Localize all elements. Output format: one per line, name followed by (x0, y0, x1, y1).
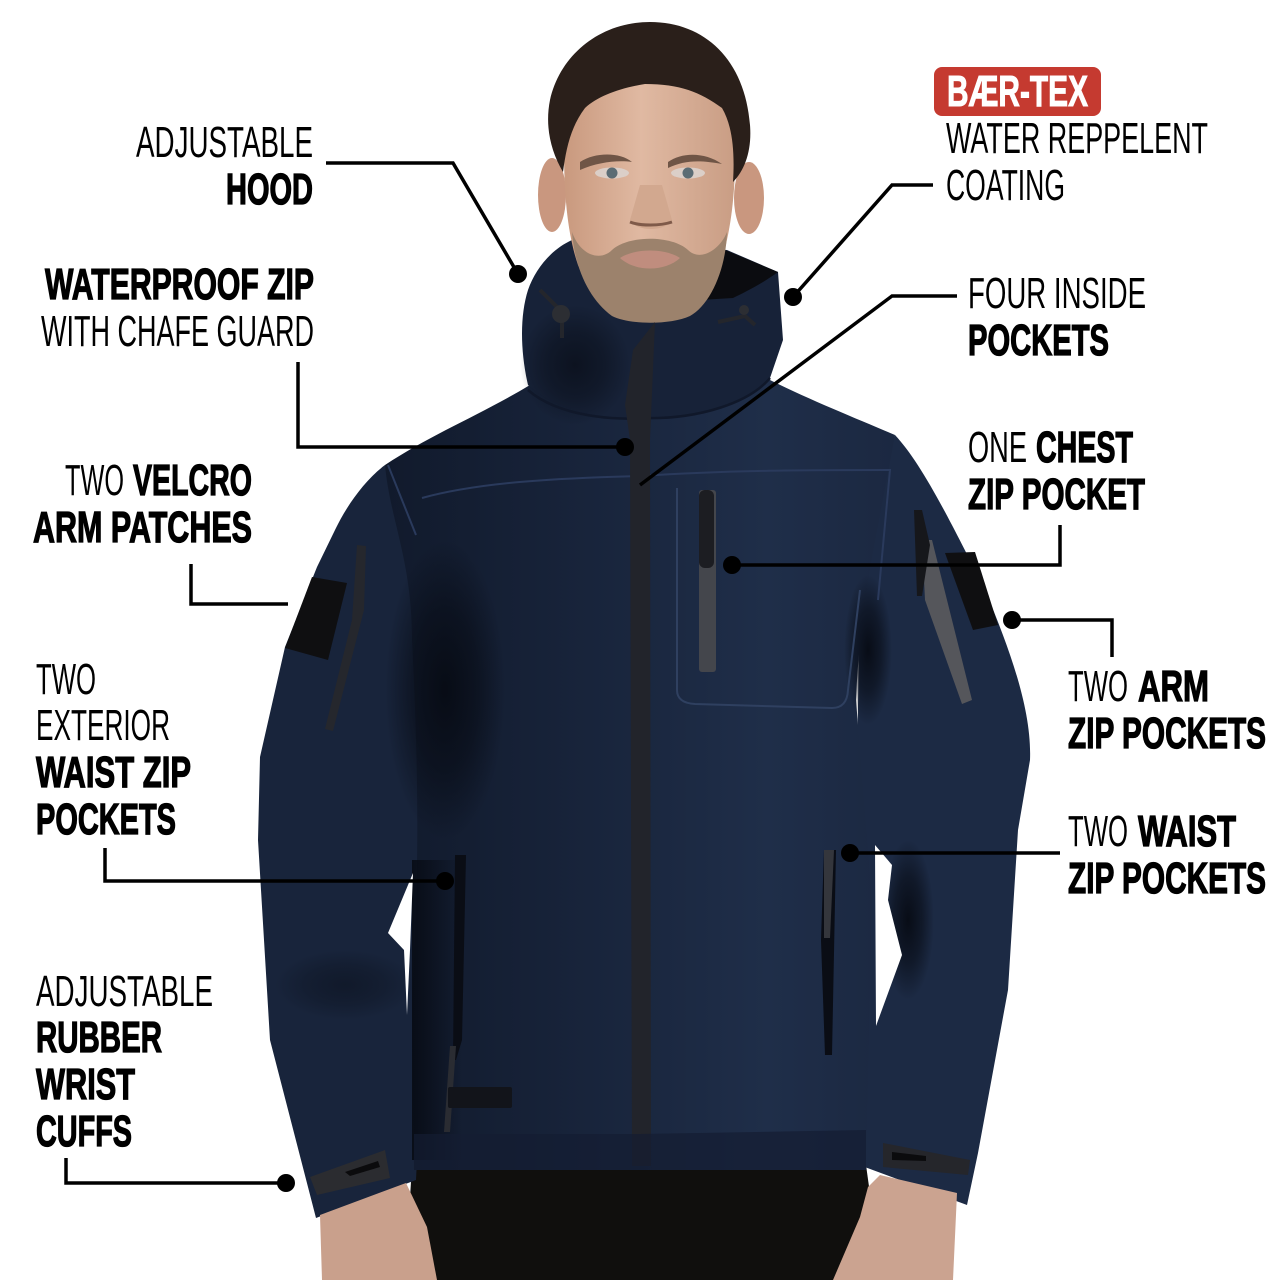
left drawcord (540, 290, 570, 338)
left waist zip (444, 855, 466, 1132)
hood interior (700, 250, 778, 300)
callout: velcro arm patches: ARM PATCHES (33, 503, 252, 552)
callout: water repellent coating: BÆR-TEX (947, 67, 1088, 116)
left arm patch (285, 577, 347, 660)
callout: one chest zip pocket (723, 423, 1145, 574)
callout: exterior waist zip pockets: EXTERIOR (36, 701, 170, 750)
callout: waist zip pockets (841, 807, 1266, 903)
left hand (320, 1183, 437, 1280)
chest pocket (677, 488, 860, 708)
callout: water repellent coating (784, 67, 1208, 306)
ears (538, 158, 764, 234)
illustration: man wearing jacket (258, 22, 1030, 1280)
callout: adjustable hood: ADJUSTABLE (136, 118, 313, 167)
center zip (625, 322, 655, 1166)
callout: rubber wrist cuffs: CUFFS (36, 1107, 132, 1156)
hair (548, 22, 750, 182)
callout: arm zip pockets: ARM (1138, 662, 1209, 711)
yoke seam (388, 465, 890, 600)
callout: exterior waist zip pockets: WAIST ZIP (36, 748, 191, 797)
right drawcord (718, 305, 755, 325)
callout: adjustable hood: HOOD (226, 165, 313, 214)
callout: exterior waist zip pockets: POCKETS (36, 795, 176, 844)
lips (620, 250, 680, 268)
callout: adjustable hood (136, 118, 527, 283)
right cuff strap (883, 1143, 970, 1175)
callout: waterproof zip (41, 260, 634, 456)
callout: exterior waist zip pockets (36, 655, 454, 890)
gap between right arm and torso (875, 845, 902, 1026)
brows and eyes (580, 154, 722, 178)
callout: waist zip pockets: TWO (1068, 807, 1128, 856)
callout: velcro arm patches: TWO (65, 456, 124, 505)
right sleeve (856, 435, 1030, 1205)
callout: arm zip pockets: TWO (1068, 662, 1128, 711)
left sleeve (258, 465, 440, 1218)
hem band (414, 1130, 866, 1170)
callout: exterior waist zip pockets: TWO (36, 655, 96, 704)
right waist zip (821, 850, 836, 1055)
callout: waterproof zip: WATERPROOF ZIP (45, 260, 314, 309)
callout: one chest zip pocket: ZIP POCKET (968, 470, 1145, 519)
hood and collar (522, 240, 783, 418)
callout: waist zip pockets: WAIST (1138, 807, 1236, 856)
hood shadow (520, 305, 630, 425)
right hand (833, 1175, 957, 1280)
callout: four inside pockets (640, 269, 1146, 485)
jacket body (385, 380, 895, 1170)
beard (572, 232, 727, 323)
callout: velcro arm patches (33, 456, 288, 604)
nose (630, 185, 672, 229)
callout: water repellent coating: COATING (946, 161, 1065, 210)
gap between left arm and torso (388, 873, 413, 1015)
jacket shadows (275, 540, 934, 1160)
callout: velcro arm patches: VELCRO (133, 456, 252, 505)
callout: rubber wrist cuffs: WRIST (36, 1060, 135, 1109)
collar fold (528, 378, 770, 419)
callout: one chest zip pocket: CHEST (1036, 423, 1133, 472)
head (564, 80, 735, 322)
callout: one chest zip pocket: ONE (968, 423, 1027, 472)
callout: arm zip pockets (1003, 611, 1266, 758)
callout: rubber wrist cuffs (36, 967, 295, 1192)
brand patch (448, 1087, 512, 1108)
callout: rubber wrist cuffs: ADJUSTABLE (36, 967, 213, 1016)
callout: four inside pockets: POCKETS (968, 316, 1109, 365)
right arm patch (945, 552, 998, 630)
callout: waterproof zip: WITH CHAFE GUARD (41, 307, 314, 356)
right arm zip (914, 510, 972, 704)
callout: four inside pockets: FOUR INSIDE (968, 269, 1146, 318)
callout: rubber wrist cuffs: RUBBER (36, 1013, 162, 1062)
left cuff strap (310, 1150, 390, 1195)
trousers (405, 1165, 882, 1280)
left arm zip (325, 545, 366, 731)
